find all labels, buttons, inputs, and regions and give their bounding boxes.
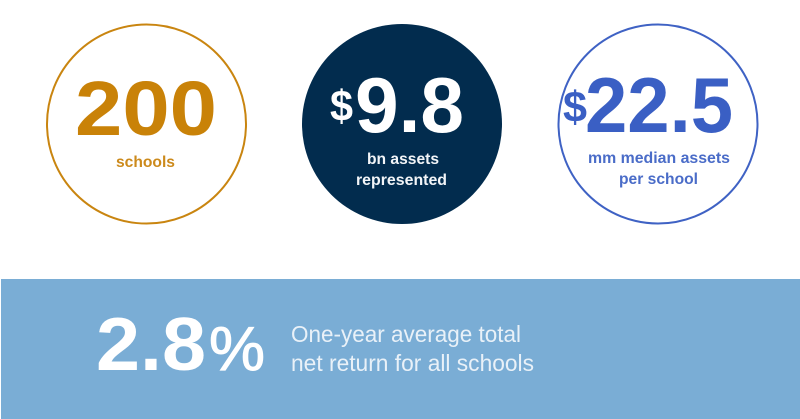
filled circle: assets	[302, 24, 502, 224]
label: mm median assets per school: per school	[619, 171, 698, 188]
number: 200: 200	[75, 66, 217, 152]
label: mm median assets per school: mm median assets	[588, 150, 730, 167]
percent sign: %	[209, 315, 265, 384]
circle outline: schools	[47, 24, 246, 224]
description text: One-year average total	[291, 321, 521, 347]
label: schools: schools	[116, 154, 175, 171]
panel: one-year return band	[1, 279, 800, 419]
panel: schools stat	[47, 24, 246, 224]
label: bn assets represented: bn assets	[367, 151, 439, 168]
panel: assets represented stat	[302, 24, 502, 224]
number: 9.8: 9.8	[355, 61, 464, 149]
panel: median assets stat	[558, 24, 758, 224]
number: 22.5: 22.5	[585, 61, 733, 149]
circle outline: median assets	[558, 24, 758, 224]
dollar sign: $	[330, 82, 353, 131]
label: bn assets represented: represented	[356, 172, 447, 189]
dollar sign: $	[563, 83, 587, 132]
band background	[1, 279, 800, 419]
number: 2.8: 2.8	[96, 302, 206, 386]
description text: net return for all schools	[291, 350, 534, 376]
